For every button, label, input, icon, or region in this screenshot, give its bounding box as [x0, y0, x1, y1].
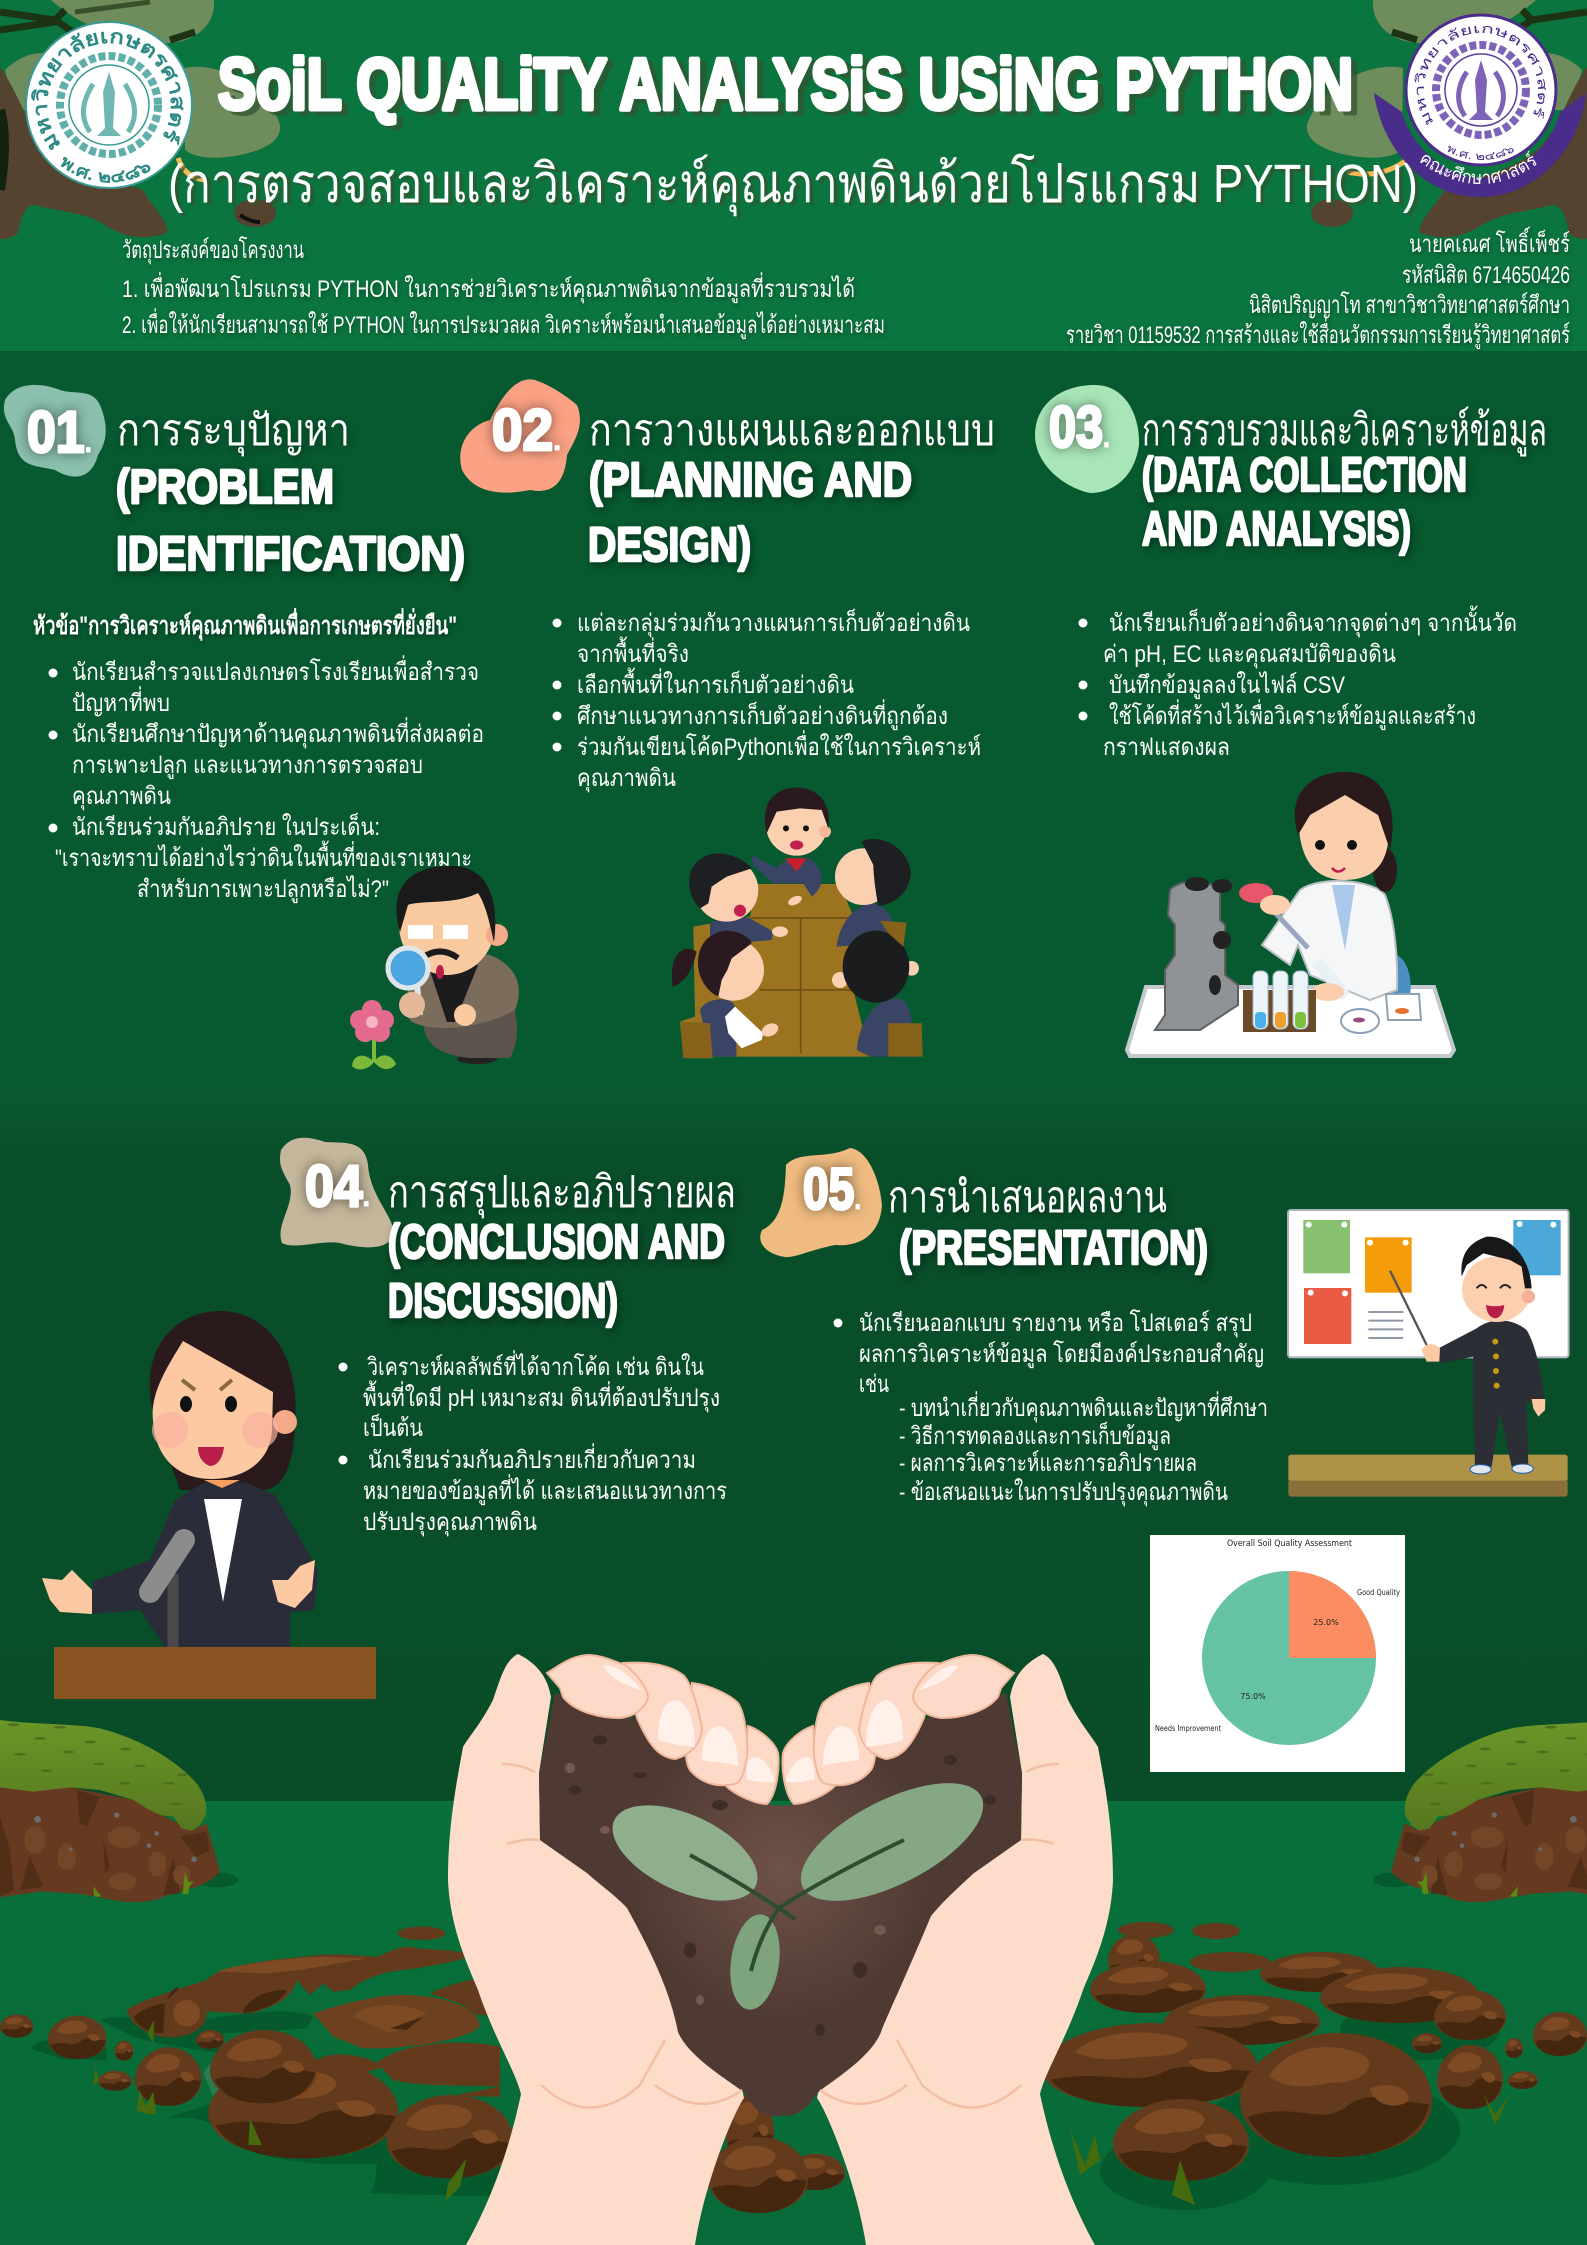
- bullet list 05: เช่น: [859, 1371, 889, 1398]
- bullet list 02: เลือกพื้นที่ในการเก็บตัวอย่างดิน: [577, 667, 854, 699]
- illustration: detective with magnifier and flower: [388, 866, 519, 1064]
- badge 05: 05.: [803, 1157, 861, 1222]
- soil speckles: [569, 1735, 996, 2036]
- bullet list 01: คุณภาพดิน: [72, 783, 171, 811]
- bullet list 05: [834, 1309, 1268, 1507]
- bullet list 01: ปัญหาที่พบ: [72, 686, 170, 717]
- bullet list 05: - ผลการวิเคราะห์และการอภิปรายผล: [899, 1449, 1197, 1477]
- decoration: right branch: [1307, 0, 1587, 239]
- section 1 background: [0, 351, 1587, 1088]
- heading 02: DESIGN): [588, 519, 751, 572]
- bullet list 04: พื้นที่ใดมี pH เหมาะสม ดินที่ต้องปรับปรุง: [363, 1380, 720, 1413]
- objectives text: [122, 236, 885, 340]
- heading 01: IDENTIFICATION): [116, 528, 465, 581]
- badge 04: [280, 1138, 394, 1247]
- panel: step 03 data collection and analysis: [1035, 385, 1547, 1056]
- illustration: dirt clumps right: [1042, 1922, 1587, 2210]
- illustration: cupped hands holding soil and seedling: [448, 1654, 1113, 2245]
- heading 04: การสรุปและอภิปรายผล: [388, 1168, 736, 1219]
- illustration: dirt clumps left: [0, 1927, 513, 2202]
- bullet list 03: บันทึกข้อมูลลงในไฟล์ CSV: [1109, 671, 1345, 700]
- chart: Overall Soil Quality Assessment pie: 25.0%: [1313, 1618, 1339, 1627]
- logo: Kasetsart University seal: พ.ศ. ๒๔๘๖: [60, 156, 150, 183]
- heading 01: การระบุปัญหา: [117, 406, 350, 457]
- author information: [1066, 226, 1570, 350]
- bullet list 05: - ข้อเสนอแนะในการปรับปรุงคุณภาพดิน: [899, 1478, 1228, 1507]
- bullet list 03: ค่า pH, EC และคุณสมบัติของดิน: [1103, 641, 1396, 669]
- bullet list 03: ใช้โค้ดที่สร้างไว้เพื่อวิเคราะห์ข้อมูลและสร้าง: [1109, 699, 1476, 731]
- bullet list 04: หมายของข้อมูลที่ได้ และเสนอแนวทางการ: [363, 1474, 727, 1506]
- chart: Overall Soil Quality Assessment pie: [1150, 1535, 1405, 1772]
- logo: Faculty of Education seal with ribbon: มหาวิทยาลัยเกษตรศาสตร์: [1414, 26, 1546, 125]
- bullet list 02: ศึกษาแนวทางการเก็บตัวอย่างดินที่ถูกต้อง: [577, 699, 948, 731]
- heading 04: (CONCLUSION AND: [388, 1216, 725, 1269]
- logo: Faculty of Education seal with ribbon: คณะศึกษาศาสตร์: [1420, 150, 1536, 184]
- panel: step 05 presentation: [760, 1148, 1569, 1772]
- bullet list 03: [1078, 605, 1517, 761]
- illustration: scientist with microscope: [1127, 772, 1454, 1056]
- logo: Faculty of Education seal with ribbon: [1374, 14, 1586, 197]
- bullet list 04: [338, 1350, 727, 1537]
- badge 02: [460, 379, 580, 493]
- bullet list 03: นักเรียนเก็บตัวอย่างดินจากจุดต่างๆ จากนั้นวัด: [1109, 605, 1517, 638]
- panel: step 02 planning and design: [460, 379, 995, 1058]
- heading 03: AND ANALYSIS): [1142, 503, 1411, 556]
- bullet list 01: นักเรียนสำรวจแปลงเกษตรโรงเรียนเพื่อสำรวจ: [72, 655, 479, 686]
- bullet list 01: นักเรียนศึกษาปัญหาด้านคุณภาพดินที่ส่งผลต่อ: [72, 717, 484, 749]
- bullet list 02: ร่วมกันเขียนโค้ดPythonเพื่อใช้ในการวิเคราะห์: [577, 730, 981, 761]
- bullet list 05: นักเรียนออกแบบ รายงาน หรือ โปสเตอร์ สรุป: [859, 1309, 1252, 1338]
- heading 05: [888, 1173, 1208, 1275]
- bullet list 01: สำหรับการเพาะปลูกหรือไม่?": [137, 875, 389, 904]
- badge 01: 01.: [27, 400, 92, 465]
- badge 03: [1035, 385, 1139, 493]
- bullet list 01: การเพาะปลูก และแนวทางการตรวจสอบ: [72, 752, 423, 780]
- panel: step 01 problem identification: [4, 385, 519, 1069]
- bullet list 04: วิเคราะห์ผลลัพธ์ที่ได้จากโค้ด เช่น ดินใน: [367, 1350, 704, 1381]
- bullet list 01: นักเรียนร่วมกันอภิปราย ในประเด็น:: [72, 812, 380, 841]
- heading 05: การนำเสนอผลงาน: [888, 1173, 1167, 1222]
- illustration: student pointing at board: [1288, 1210, 1569, 1497]
- left hand: [448, 1654, 744, 2245]
- creases: [502, 1764, 1059, 2108]
- chart: Overall Soil Quality Assessment pie: Overall Soil Quality Assessment: [1227, 1539, 1352, 1549]
- fingers left: [547, 1655, 779, 1804]
- bullet list 05: - วิธีการทดลองและการเก็บข้อมูล: [899, 1421, 1171, 1451]
- section 2 background: [0, 1088, 1587, 1801]
- panel: step 04 conclusion and discussion: [42, 1138, 736, 1699]
- bullet list 04: นักเรียนร่วมกันอภิปรายเกี่ยวกับความ: [368, 1443, 696, 1474]
- bullet list 02: คุณภาพดิน: [577, 765, 676, 793]
- bullet list 04: ปรับปรุงคุณภาพดิน: [363, 1509, 537, 1537]
- chart: Overall Soil Quality Assessment pie: 75.0%: [1240, 1692, 1266, 1701]
- bullet list 01: [48, 655, 484, 904]
- badge 05: [760, 1148, 882, 1257]
- heading 01: [116, 406, 465, 581]
- icon: pink flower: [350, 1000, 396, 1069]
- soil heart: [539, 1693, 1022, 2116]
- logo: Faculty of Education seal with ribbon: พ.ศ. ๒๔๘๖: [1448, 146, 1514, 160]
- heading 04: DISCUSSION): [388, 1275, 618, 1328]
- heading 02: [588, 406, 995, 572]
- illustration: dirt clump center: [708, 2094, 845, 2213]
- illustration: presenter at podium: [42, 1311, 376, 1699]
- heading 04: [388, 1168, 736, 1328]
- header background: [0, 0, 1587, 351]
- bullet list 03: กราฟแสดงผล: [1103, 734, 1230, 761]
- fingers right: [782, 1655, 1014, 1804]
- heading 03: [1142, 406, 1547, 556]
- ground background: [0, 1801, 1587, 2245]
- heading 02: การวางแผนและออกแบบ: [589, 406, 995, 455]
- bullet list 02: จากพื้นที่จริง: [577, 636, 689, 668]
- badge 02: 02.: [492, 398, 561, 463]
- bullet list 02: แต่ละกลุ่มร่วมกันวางแผนการเก็บตัวอย่างดิน: [577, 608, 970, 638]
- topic line: หัวข้อ"การวิเคราะห์คุณภาพดินเพื่อการเกษตรที่ยั่งยืน": [33, 608, 457, 642]
- objectives text: 1. เพื่อพัฒนาโปรแกรม PYTHON ในการช่วยวิเคราะห์คุณภาพดินจากข้อมูลที่รวบรวมได้: [122, 272, 855, 304]
- bullet list 02: [552, 608, 981, 793]
- right hand: [817, 1654, 1113, 2245]
- bullet list 01: "เราจะทราบได้อย่างไรว่าดินในพื้นที่ของเราเหมาะ: [55, 840, 472, 872]
- badge 01: [4, 385, 106, 477]
- heading 05: (PRESENTATION): [899, 1222, 1208, 1275]
- bullet list 04: เป็นต้น: [363, 1413, 423, 1442]
- illustration: soil mounds: [0, 1720, 1587, 1902]
- badge 03: 03.: [1049, 395, 1110, 460]
- seedling leaves: [598, 1759, 1000, 2013]
- heading 02: (PLANNING AND: [589, 454, 912, 507]
- bullet list 05: ผลการวิเคราะห์ข้อมูล โดยมีองค์ประกอบสำคัญ: [859, 1340, 1264, 1369]
- objectives text: วัตถุประสงค์ของโครงงาน: [122, 236, 304, 265]
- objectives text: 2. เพื่อให้นักเรียนสามารถใช้ PYTHON ในการประมวลผล วิเคราะห์พร้อมนำเสนอข้อมูลได้อย่างเหมาะสม: [122, 308, 885, 340]
- chart: Overall Soil Quality Assessment pie: Needs Improvement: [1155, 1724, 1221, 1733]
- bullet list 05: - บทนำเกี่ยวกับคุณภาพดินและปัญหาที่ศึกษา: [899, 1391, 1268, 1423]
- heading 01: (PROBLEM: [116, 461, 334, 514]
- logo: Kasetsart University seal: มหาวิทยาลัยเกษตรศาสตร์: [31, 32, 184, 150]
- badge 04: 04.: [305, 1154, 370, 1219]
- chart: Overall Soil Quality Assessment pie: Good Quality: [1357, 1588, 1400, 1597]
- illustration: students around a table: [672, 787, 923, 1058]
- decoration: left branch: [0, 0, 280, 239]
